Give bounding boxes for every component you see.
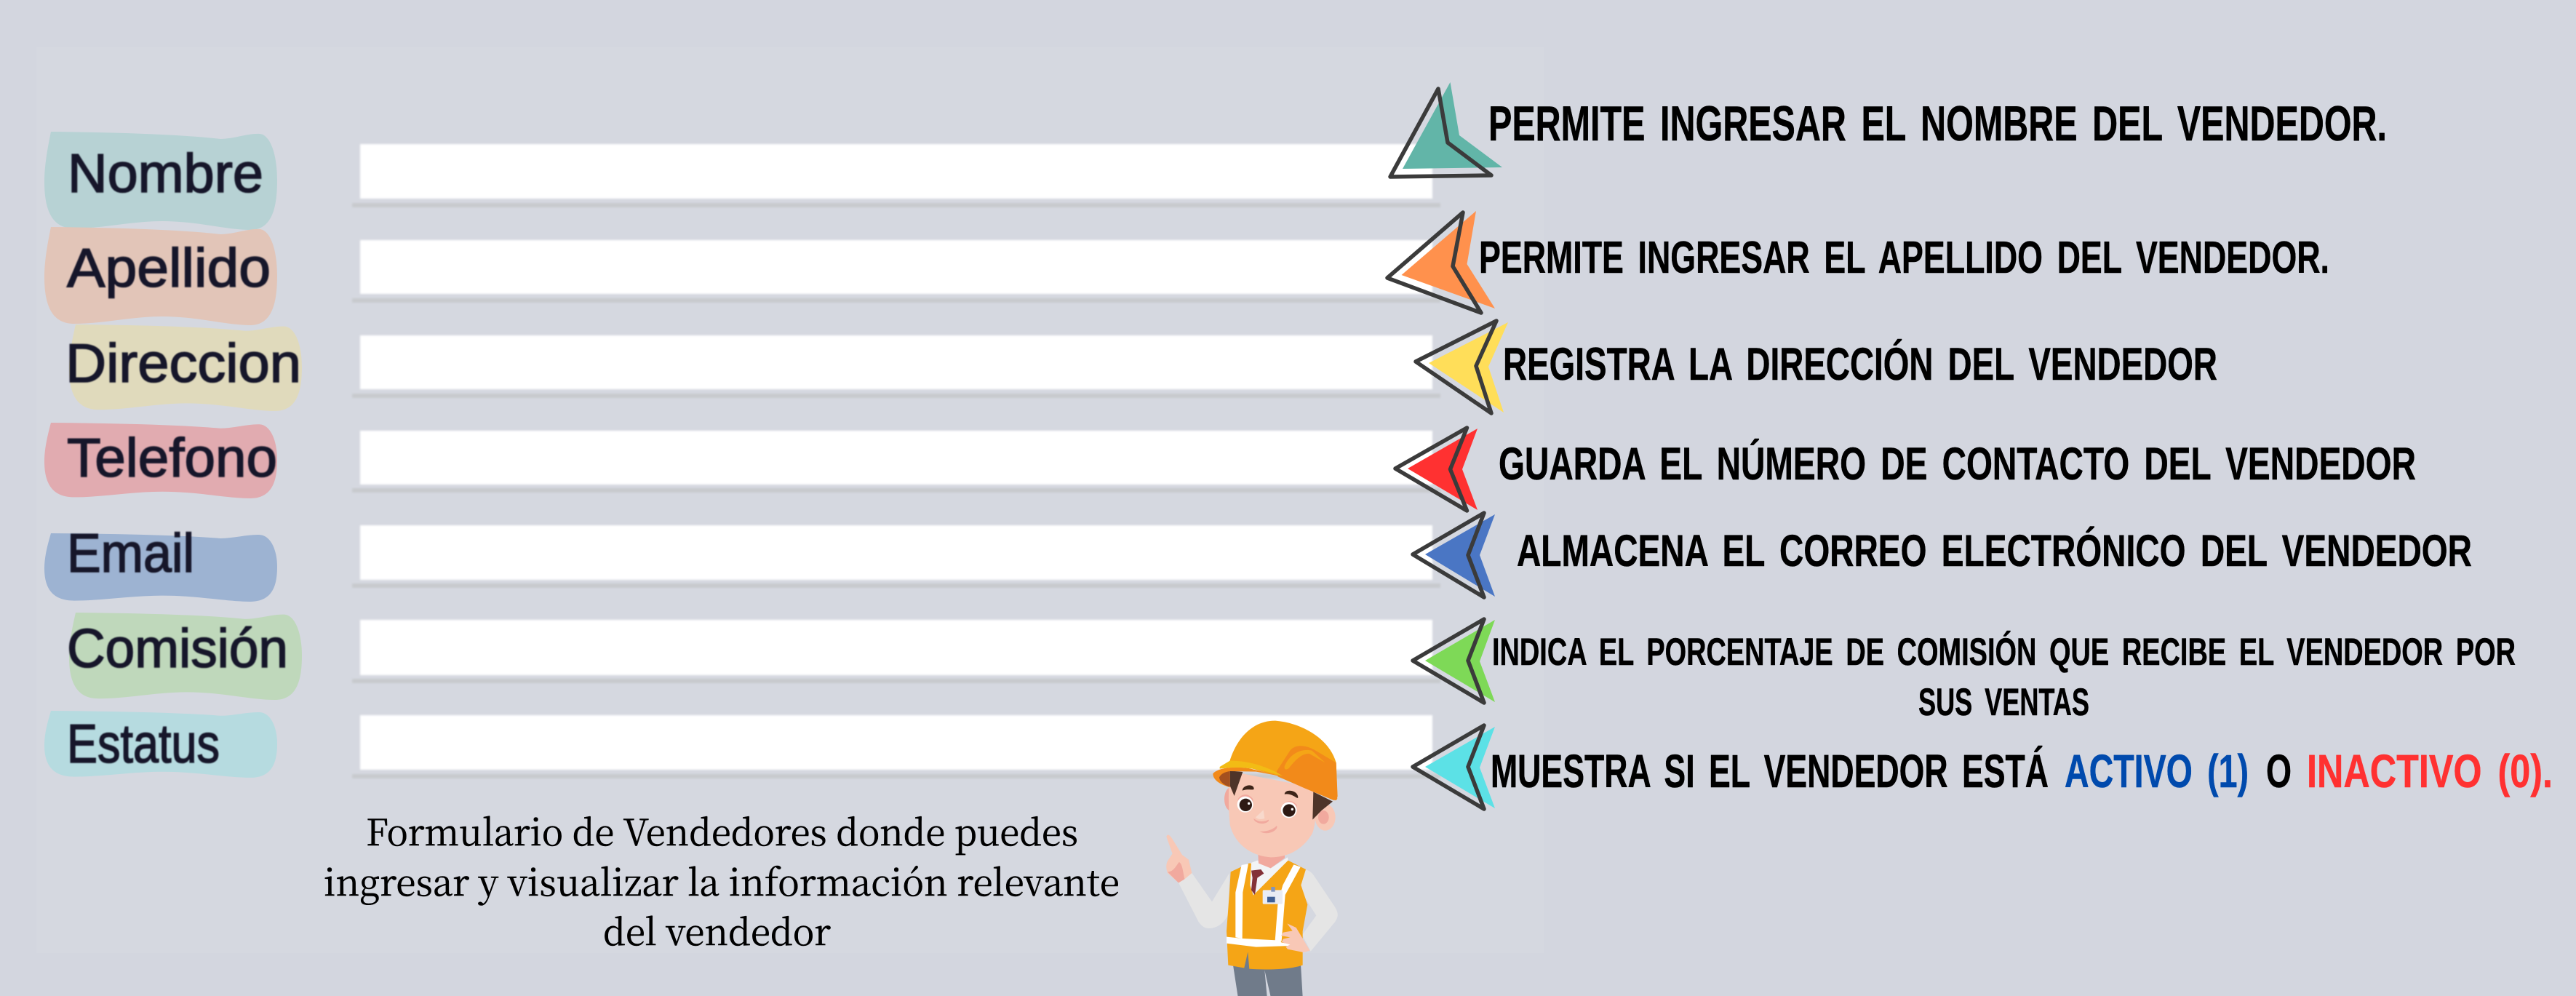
trousers	[1233, 964, 1303, 996]
icon: blue arrow	[1413, 513, 1495, 597]
icon: green arrow	[1413, 619, 1495, 703]
neck	[1258, 853, 1285, 868]
hair	[1230, 770, 1333, 820]
vest	[1227, 861, 1307, 969]
description: comision	[1492, 630, 2516, 724]
label: Nombre: Nombre	[68, 143, 263, 204]
description: direccion: REGISTRA LA DIRECCIÓN DEL VENDEDOR	[1503, 339, 2217, 390]
label: Comision: Comisión	[67, 618, 288, 679]
left sleeve	[1179, 873, 1229, 928]
label: Nombre	[44, 132, 277, 230]
panel: form fields	[352, 144, 1440, 778]
right sleeve	[1301, 869, 1338, 952]
field: Direccion input	[352, 335, 1440, 398]
field: Comision input	[352, 620, 1440, 683]
label: Direccion: Direccion	[65, 332, 301, 394]
caption text	[324, 804, 1120, 956]
face	[1229, 771, 1317, 857]
icon: red arrow	[1395, 428, 1478, 511]
id badge	[1263, 887, 1283, 904]
field: Estatus input	[352, 715, 1440, 778]
label: Estatus: Estatus	[67, 713, 220, 774]
label: Apellido	[44, 227, 277, 325]
hip hand	[1281, 923, 1310, 952]
icon: yellow arrow	[1416, 321, 1508, 413]
label: Comision	[67, 613, 302, 700]
description: comision: SUS VENTAS	[1918, 681, 2089, 724]
label: Email: Email	[67, 522, 194, 583]
description: estatus: O	[2266, 745, 2292, 797]
description: estatus: ACTIVO (1)	[2065, 745, 2249, 797]
illustration: construction worker	[1166, 721, 1338, 996]
icon: teal arrow	[1390, 82, 1502, 177]
left ear	[1224, 787, 1237, 810]
caption text: ingresar y visualizar la información relevante	[324, 854, 1120, 907]
hard hat	[1213, 721, 1338, 800]
icon: cyan arrow	[1413, 725, 1495, 809]
vest notch	[1244, 952, 1249, 969]
field: Apellido input	[352, 240, 1440, 303]
field: Email input	[352, 525, 1440, 588]
pointing hand	[1166, 835, 1192, 883]
reflective straps	[1227, 864, 1301, 947]
tie	[1251, 869, 1264, 895]
caption text: Formulario de Vendedores donde puedes	[366, 804, 1078, 856]
label: Email	[44, 522, 277, 602]
caption text: del vendedor	[603, 904, 831, 956]
right ear	[1315, 804, 1336, 831]
label: Direccion	[65, 324, 302, 411]
shirt collar	[1250, 857, 1288, 895]
label: Telefono: Telefono	[67, 427, 277, 488]
description: estatus: MUESTRA SI EL VENDEDOR ESTÁ	[1491, 745, 2049, 797]
face details	[1237, 785, 1298, 833]
field: Telefono input	[352, 431, 1440, 493]
icon: orange arrow	[1387, 211, 1495, 313]
label: Apellido: Apellido	[67, 237, 271, 298]
field: Nombre input	[352, 144, 1440, 207]
